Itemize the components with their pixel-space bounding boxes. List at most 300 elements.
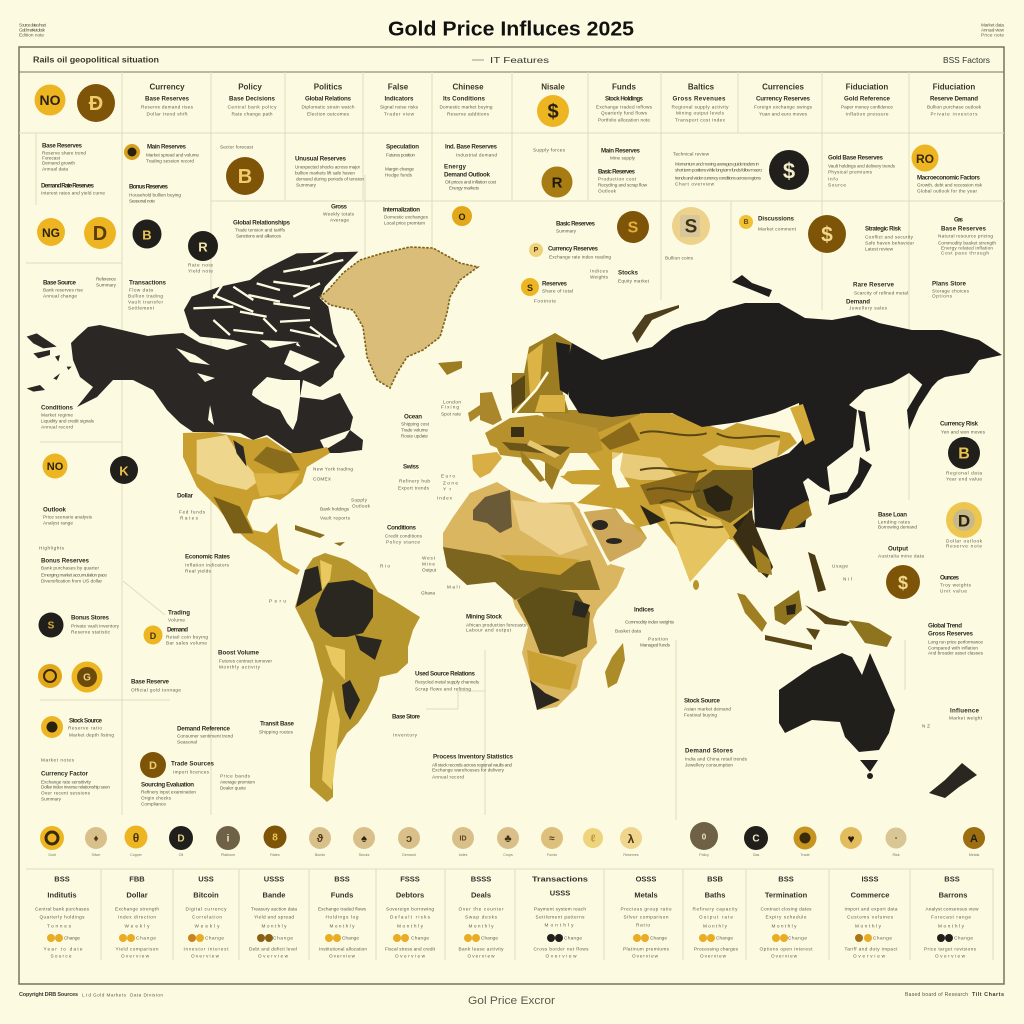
- table column 6: Sovereign borrowing: [386, 906, 434, 912]
- text: row 2 block 6: Unusual Reserves: [295, 156, 347, 162]
- coin 6: Rates: [270, 853, 280, 857]
- text: left map block 10: Transit Base: [260, 720, 295, 728]
- text: row 2 block 4: [129, 184, 181, 204]
- table column 13: BSS: [944, 874, 960, 884]
- text: east Asia block: [940, 420, 986, 434]
- text: row 2 block 10: Basic Reserves: [598, 168, 636, 176]
- column heading: False: Indicators: [384, 96, 414, 102]
- column heading: Policy: Base Decisions: [229, 96, 276, 102]
- text: row 2 block 13: Global outlook for the year: [917, 188, 977, 194]
- text: Indian Ocean block 2: India and China retail trends: [685, 756, 748, 762]
- text: Indian Ocean tags: [615, 606, 675, 648]
- coin: NO gold: NO: [47, 461, 64, 473]
- table column 7: Over the counter: [458, 906, 504, 912]
- column heading: Chinese: Chinese: [452, 82, 484, 92]
- text: left map block 9: Base Reserve: [131, 678, 170, 686]
- column heading: Filtration: Fiduciation: [933, 82, 975, 92]
- text: South Atlantic block 3: Inventory: [393, 732, 418, 738]
- coin 7: Bonds: [315, 853, 325, 857]
- coin: dark B: [132, 220, 162, 248]
- table column 13: Overview: [935, 954, 966, 958]
- text: row 3 block 1: Reference: [96, 276, 116, 282]
- top right note: Annual view: [981, 28, 1005, 32]
- column heading: Funds: [596, 82, 653, 122]
- bottom table lines: [26, 869, 994, 960]
- text: left map block 1: [41, 404, 95, 430]
- coin: brown dollar: $: [821, 224, 833, 246]
- column heading: Filtration: Bullion purchase outlook: [927, 104, 982, 110]
- text: US east coast: COMEX: [313, 476, 332, 482]
- coin: pale with note: Bullion coins: [665, 256, 694, 260]
- text: Pacific block 4: Compared with inflation: [928, 646, 978, 650]
- text: row 2 block 3: [146, 144, 199, 164]
- table column 1: Change: [64, 936, 80, 940]
- text: Mexico labels: Fed funds: [179, 510, 206, 514]
- text: Indian Ocean block 2: Demand Stores: [685, 748, 734, 754]
- text: left map block 9: [131, 678, 181, 692]
- coin: NO small: NG: [42, 226, 60, 240]
- text: row 3 block 11: Safe haven behaviour: [865, 240, 914, 246]
- text: row 3 block 3: Trade tension and tariffs: [235, 228, 286, 232]
- table column 4: [249, 874, 297, 958]
- text: Indian Ocean tags: Position: [648, 636, 668, 642]
- text: West Africa tags: Peru: [269, 598, 286, 604]
- text: row 2 block 3: Trading session record: [146, 158, 194, 164]
- table column 4: Treasury auction data: [251, 906, 297, 912]
- table column 9: Silver comparison: [624, 914, 669, 920]
- table column 1: Tonnes: [47, 924, 72, 928]
- text: row 3 block 5: Internalization: [383, 206, 420, 214]
- text: row 2 block 10: [598, 148, 648, 194]
- table column 9: Metals: [634, 890, 658, 900]
- Russia and north-east Asia: [559, 303, 1002, 530]
- coin 5: i: [227, 834, 230, 844]
- column heading: Nisale with coin: $: [547, 101, 559, 123]
- column heading: Baltics: Regional supply activity: [672, 104, 729, 110]
- coin: brown dollar small: [886, 565, 920, 599]
- coin 13: ℓ: [591, 834, 596, 844]
- column heading: Currencies: [754, 82, 813, 116]
- top right note: Price note: [981, 32, 1004, 38]
- column heading: Currencies: Currencies: [762, 82, 804, 92]
- column heading: Chinese: [440, 82, 493, 116]
- footer right: Tilt Charts: [972, 992, 1004, 998]
- column heading: Baltics: [672, 82, 729, 122]
- text: row 3 block 14: Plans Store: [932, 280, 967, 288]
- coin: NO: NO: [40, 92, 61, 108]
- text: Indian Ocean block 1: Asian market demand: [684, 706, 731, 712]
- text: Pacific block 3: Unit value: [940, 588, 967, 594]
- Italy and Balkans: [520, 450, 560, 490]
- text: left map block 6: [71, 614, 120, 634]
- top right note: [981, 22, 1005, 38]
- table column 8: Transactions: [532, 874, 588, 884]
- text: left map block 1: Conditions: [41, 404, 74, 412]
- table column 6: Default risks: [390, 914, 431, 920]
- text and coin: row 3 block 7: [529, 243, 611, 260]
- text: Pacific block 2: Australia mine data: [878, 554, 924, 558]
- coin 17: Trade: [800, 853, 810, 857]
- Turkey: [560, 472, 605, 485]
- table column 5: Monthly: [330, 924, 355, 928]
- Scandinavia and north Europe: [512, 333, 572, 413]
- text: Atlantic block 4: Zone: [443, 480, 458, 486]
- text: left map block 1: Market regime: [41, 412, 73, 418]
- coin: dark B: B: [142, 228, 152, 242]
- text: row 2 block 13: Growth, debt and recession risk: [917, 182, 983, 188]
- text: east Asia block: Yen and won moves: [941, 430, 986, 434]
- coin: dark dollar: [769, 150, 809, 190]
- table column 6: Overview: [395, 954, 426, 958]
- South East Asia: [737, 545, 892, 650]
- text: row 2 block 8: Energy: [444, 164, 467, 170]
- text: row 3 block 13: Demand: [846, 298, 870, 306]
- column heading: Currency: Base Reserves: [145, 96, 190, 102]
- grid lines: [19, 72, 1004, 820]
- text: left map block 14: Dealer quote: [220, 786, 246, 790]
- column heading: Fiduciation: Paper money confidence: [841, 104, 893, 110]
- text: row 2 block 11: Chart overview: [675, 182, 715, 186]
- text: Philippine Sea tags: [832, 564, 852, 582]
- coin: pale with note: [665, 207, 710, 260]
- table column 3: Overview: [191, 954, 220, 958]
- Caribbean islands: [295, 525, 345, 546]
- Australia: [779, 653, 895, 752]
- coin and text: left map block 7: [144, 626, 208, 646]
- table column 8: Cross border net flows: [534, 946, 589, 952]
- coin: dark R with note: R: [198, 240, 208, 254]
- table column 7: Monthly: [468, 924, 494, 928]
- Tasmania: [860, 760, 878, 779]
- coin 16: C: [752, 834, 760, 844]
- text: row 3 block 2: Transactions: [129, 280, 167, 286]
- text: row 2 block 13: [917, 174, 983, 194]
- text: Pacific block 4: Long run price performance: [928, 640, 983, 644]
- table column 4: Overview: [258, 954, 289, 958]
- text: row 2 block 2: Demand Rate Reserves: [41, 182, 95, 190]
- coin: brown dollar small: $: [898, 573, 908, 593]
- table column 7: Deals: [471, 890, 491, 900]
- text: row 2 block 6: [295, 156, 364, 188]
- table column 1: Quarterly holdings: [40, 914, 85, 920]
- text: South Atlantic block 4: Process Inventory Statistics: [433, 754, 514, 760]
- coin 4: Oil: [179, 853, 183, 857]
- text: row 3 block 12: [938, 216, 996, 256]
- text: left map block 15: Over recent sessions: [41, 790, 91, 796]
- text: left map block 1: Liquidity and credit signals: [41, 418, 95, 424]
- text: row 3 block 8: Stocks: [618, 270, 639, 276]
- text: row 2 block 2: [41, 182, 105, 196]
- text: West Africa tags: Rio: [380, 564, 390, 568]
- column heading: False: [380, 82, 419, 116]
- text: row 2 block 1: Base Reserves: [42, 142, 83, 150]
- text and coin: row 3 block 10: B: [743, 219, 749, 226]
- coin: gold brown G: [72, 662, 102, 692]
- text: row 3 block 1: Bank reserves rise: [43, 288, 83, 292]
- table column 6: Monthly: [397, 924, 424, 928]
- text: Atlantic block 3: Export trends: [398, 486, 430, 490]
- text: Indian Ocean tags: Indices: [634, 606, 655, 614]
- text: Gulf labels: Outlook: [352, 504, 371, 508]
- column heading: Filtration: [927, 82, 982, 116]
- column heading: Currency: [141, 82, 194, 116]
- Black Sea: [560, 453, 600, 472]
- Canadian inlets: [176, 340, 350, 450]
- table column 12: ISSS: [861, 874, 879, 884]
- table column 12: Monthly: [855, 924, 882, 928]
- text: South Atlantic block 1: African production forecasts: [466, 622, 527, 628]
- text: Indian Ocean block 1: [684, 698, 731, 718]
- text: Atlantic block 1: Ocean: [404, 414, 422, 420]
- text: row 3 block 14: Storage choices: [932, 288, 970, 294]
- column heading: Filtration: Reserve Demand: [930, 96, 978, 102]
- table column 10: Output rate: [699, 914, 733, 920]
- coin: pale gold D with note: D: [958, 512, 970, 530]
- text: left map block 3: Bank purchases by quarter: [41, 566, 99, 570]
- coin: dark dollar: $: [783, 158, 795, 184]
- coin 18: ♥: [847, 832, 855, 846]
- table column 8: Overview: [546, 954, 577, 958]
- coin: dark B with note: Regional data: [946, 470, 982, 476]
- text: row 3 block 1: [43, 276, 117, 298]
- Sakhalin: [858, 410, 870, 452]
- text: row 3 block 8: Indices: [590, 268, 609, 274]
- table column 3: Correlation: [192, 914, 222, 920]
- text: Gulf labels: Vault reports: [320, 516, 351, 520]
- text: Indian Ocean tags: Managed funds: [640, 642, 671, 648]
- text: row 2 block 6: bullion markets lift safe haven: [295, 170, 355, 176]
- text: Pacific block: [878, 512, 917, 530]
- header band: IT Features: [490, 55, 549, 65]
- text: left map block 11: Consumer sentiment trend: [177, 734, 233, 738]
- footer left: Copyright DRB Sources: [19, 992, 78, 998]
- table column 11: Monthly: [772, 924, 797, 928]
- table column 2: [115, 874, 159, 958]
- text: US east coast: New York trading: [313, 466, 353, 472]
- text: Pacific block: Borrowing demand: [878, 524, 917, 530]
- table column 10: Refinery capacity: [692, 906, 738, 912]
- column heading: Funds: Quarterly fund flows: [601, 110, 648, 116]
- table column 5: Change: [342, 936, 359, 940]
- top left note: Edition note: [19, 32, 44, 38]
- text: left map block 15: Currency Factor: [41, 770, 89, 778]
- coin 10: [452, 827, 474, 857]
- text: left map block 3: Highlights: [39, 546, 65, 550]
- text: Mexico labels: Dollar: [177, 492, 194, 500]
- column heading: Policy: Policy: [238, 82, 262, 92]
- column heading: Funds: Stock Holdings: [605, 96, 644, 102]
- table column 10: Overview: [700, 954, 727, 958]
- column heading: Chinese: Domestic market buying: [440, 104, 493, 110]
- text: left map block 1: Annual record: [41, 424, 73, 430]
- coin: gold brown G: G: [83, 672, 91, 684]
- column heading: Currency: Dollar trend shift: [146, 112, 188, 116]
- table column 1: [35, 874, 90, 958]
- coin and text: left map block 12: Stock Source: [69, 718, 103, 724]
- text and coin: row 2 block 9: Supply forces: [533, 148, 566, 152]
- text and coin: row 3 block 9: Footnote: [534, 298, 556, 304]
- text: row 3 block 3: Sanctions and alliances: [236, 234, 282, 238]
- coin 6: 8: [272, 832, 278, 844]
- text: Pacific block 5: Market weight: [949, 716, 983, 720]
- text: Atlantic block 3: [398, 464, 430, 490]
- table column 9: Ratio: [636, 922, 650, 928]
- text: South Atlantic block 2: [415, 670, 480, 692]
- column heading: Chinese: Reserve additions: [447, 112, 490, 116]
- text: row 2 block 7: Futures position: [386, 152, 415, 158]
- text: row 3 block 14: Options: [932, 294, 953, 298]
- text: row 2 block 12: Info: [828, 176, 838, 182]
- table column 1: Year to date: [44, 946, 83, 952]
- table column 10: [692, 874, 739, 958]
- text: row 2 block 2: Interest rates and yield curve: [41, 190, 105, 196]
- text: left map block 3: Diversification from US dollar: [41, 578, 102, 584]
- text: West Africa tags: [269, 556, 460, 604]
- Central Europe underlay: [540, 410, 640, 440]
- coin 7: [309, 827, 331, 857]
- coin 5: [216, 826, 240, 857]
- coin: brown: [617, 211, 649, 243]
- table column 8: Payment system reach: [534, 906, 586, 912]
- text: row 3 block 1: Annual change: [43, 294, 77, 298]
- text: Pacific block 3: Ounces: [940, 574, 960, 582]
- text: left map block 2: Analyst range: [43, 520, 73, 526]
- text: South Atlantic block 3: [392, 714, 421, 738]
- text: left map block 6: Bonus Stores: [71, 614, 110, 622]
- text: left map block 14: Average premium: [220, 780, 255, 784]
- table column 9: Precious group ratio: [620, 906, 672, 912]
- Asia gold: [563, 412, 797, 582]
- text: South Atlantic block 2: Recycled metal supply channels: [415, 680, 480, 684]
- text: row 3 block 12: Natural resource pricing: [938, 234, 993, 238]
- coin: brown dollar: [808, 215, 846, 253]
- text: Indian Ocean block 2: Jewellery consumption: [685, 762, 733, 768]
- coin and text: left map block 7: Retail coin buying: [166, 634, 208, 640]
- table column 3: Bitcoin: [193, 890, 219, 900]
- coin and text: left map block 13: Import licences: [173, 770, 210, 774]
- text: row 2 block 7: Speculation: [386, 144, 419, 150]
- text: Atlantic block 2: Fixing: [441, 404, 459, 410]
- text: row 2 block 8: Ind. Base Reserves: [445, 144, 498, 150]
- text: Pacific block 2: [878, 546, 924, 558]
- table column 2: Yield comparison: [116, 946, 159, 952]
- coin 19: Risk: [892, 853, 900, 857]
- table column 12: Tariff and duty impact: [844, 946, 898, 952]
- table column 9: Change: [650, 936, 667, 940]
- column heading: Baltics: Transport cost index: [675, 118, 726, 122]
- text: Pacific block 4: Gross Reserves: [928, 630, 974, 638]
- coin: RO: RO: [916, 152, 934, 166]
- column heading: Politics: Global Relations: [305, 96, 352, 102]
- table column 8: Monthly: [544, 922, 574, 928]
- text: Atlantic block 5: [385, 524, 423, 544]
- text: left map block 14: [220, 774, 255, 790]
- text: South Atlantic block 3: Base Store: [392, 714, 421, 720]
- column heading: Policy: Central bank policy: [228, 104, 277, 110]
- coin 15: Policy: [699, 853, 709, 857]
- text: South Atlantic block 4: [432, 754, 514, 780]
- text: left map block 8: Futures contract turnover: [219, 658, 272, 664]
- coin: pale gold D with note: [946, 502, 983, 548]
- table column 7: Overview: [468, 954, 495, 958]
- coin 2: ♦: [93, 834, 99, 844]
- text: row 2 block 11: trends and wider currency conditions across regions: [675, 176, 762, 180]
- text: South Atlantic block 4: Annual record: [432, 774, 464, 780]
- table column 8: USSS: [550, 888, 570, 898]
- column heading: Currency: Currency: [149, 82, 185, 92]
- text: row 3 block 8: Equity market: [618, 278, 650, 284]
- Arabian peninsula: [583, 508, 647, 562]
- table column 12: [844, 874, 898, 958]
- table column 7: [458, 874, 504, 958]
- text and coin: row 3 block 7: Currency Reserves: [548, 246, 599, 252]
- table column 5: Exchange traded flows: [318, 906, 367, 912]
- text: left map block 15: Market notes: [41, 758, 75, 762]
- text: row 3 block 4: [323, 204, 355, 222]
- text: left map block 11: [177, 726, 233, 744]
- text: Mexico labels: Rates: [180, 516, 199, 520]
- coin: dark K: K: [119, 464, 129, 478]
- footer left: Ltd: [82, 992, 91, 998]
- text: row 2 block 10: Mine supply: [610, 156, 636, 160]
- text: Indian Ocean block 2: [685, 748, 748, 768]
- text: row 2 block 11: Technical review: [673, 152, 710, 156]
- header band: Rails oil geopolitical situation: [33, 56, 159, 64]
- column heading: Funds: Exchange traded inflows: [596, 104, 653, 110]
- table column 5: Overview: [329, 954, 356, 958]
- Svalbard: [732, 275, 772, 297]
- coin 13: [583, 828, 603, 848]
- column heading: Politics: Diplomatic strain watch: [302, 104, 355, 110]
- text: Pacific block 5: [922, 708, 983, 728]
- header band: [19, 55, 1004, 72]
- table column 3: Weekly: [194, 924, 220, 928]
- text: left map block 16: Origin checks: [141, 796, 172, 800]
- Red Sea: [581, 510, 609, 565]
- table column 9: [620, 874, 672, 958]
- column heading: Fiduciation: Fiduciation: [846, 82, 888, 92]
- text: West Africa tags: Ghana: [421, 590, 435, 596]
- table column 9: Overview: [632, 954, 659, 958]
- coin and text: left map block 13: D: [149, 760, 157, 772]
- text: South Atlantic block 4: All stock records across regional vaults and: [432, 762, 512, 768]
- text: row 3 block 12: Gas: [954, 216, 964, 224]
- coin 17: [794, 826, 816, 857]
- text: Atlantic block 4: [437, 474, 458, 500]
- text: row 3 block 8: [590, 268, 650, 284]
- North America Arctic islands: [27, 252, 358, 392]
- column heading: Policy: Rate change path: [232, 112, 273, 116]
- table column 13: Barrons: [939, 890, 967, 900]
- table column 5: BSS: [334, 874, 350, 884]
- table column 10: Change: [716, 936, 733, 940]
- text: Atlantic block 2: London: [443, 400, 461, 404]
- text: Atlantic block 4: Index: [437, 496, 453, 500]
- table column 7: BSSS: [471, 874, 491, 884]
- text: row 3 block 5: [383, 206, 429, 226]
- text: Atlantic block 5: Policy stance: [386, 540, 420, 544]
- coin 2: [85, 827, 107, 857]
- text: left map block 16: Refinery input examination: [141, 790, 196, 794]
- coin 6: [264, 826, 286, 857]
- text and coin: row 3 block 9: Share of total: [542, 288, 573, 294]
- coin: NO gold: [42, 454, 68, 478]
- coin: dark B with note: Year end value: [946, 476, 982, 482]
- text: Atlantic block 3: Refinery hub: [399, 478, 430, 484]
- table column 4: Yield and spread: [254, 914, 294, 920]
- coin 3: [124, 826, 148, 857]
- text: row 3 block 14: [932, 280, 970, 298]
